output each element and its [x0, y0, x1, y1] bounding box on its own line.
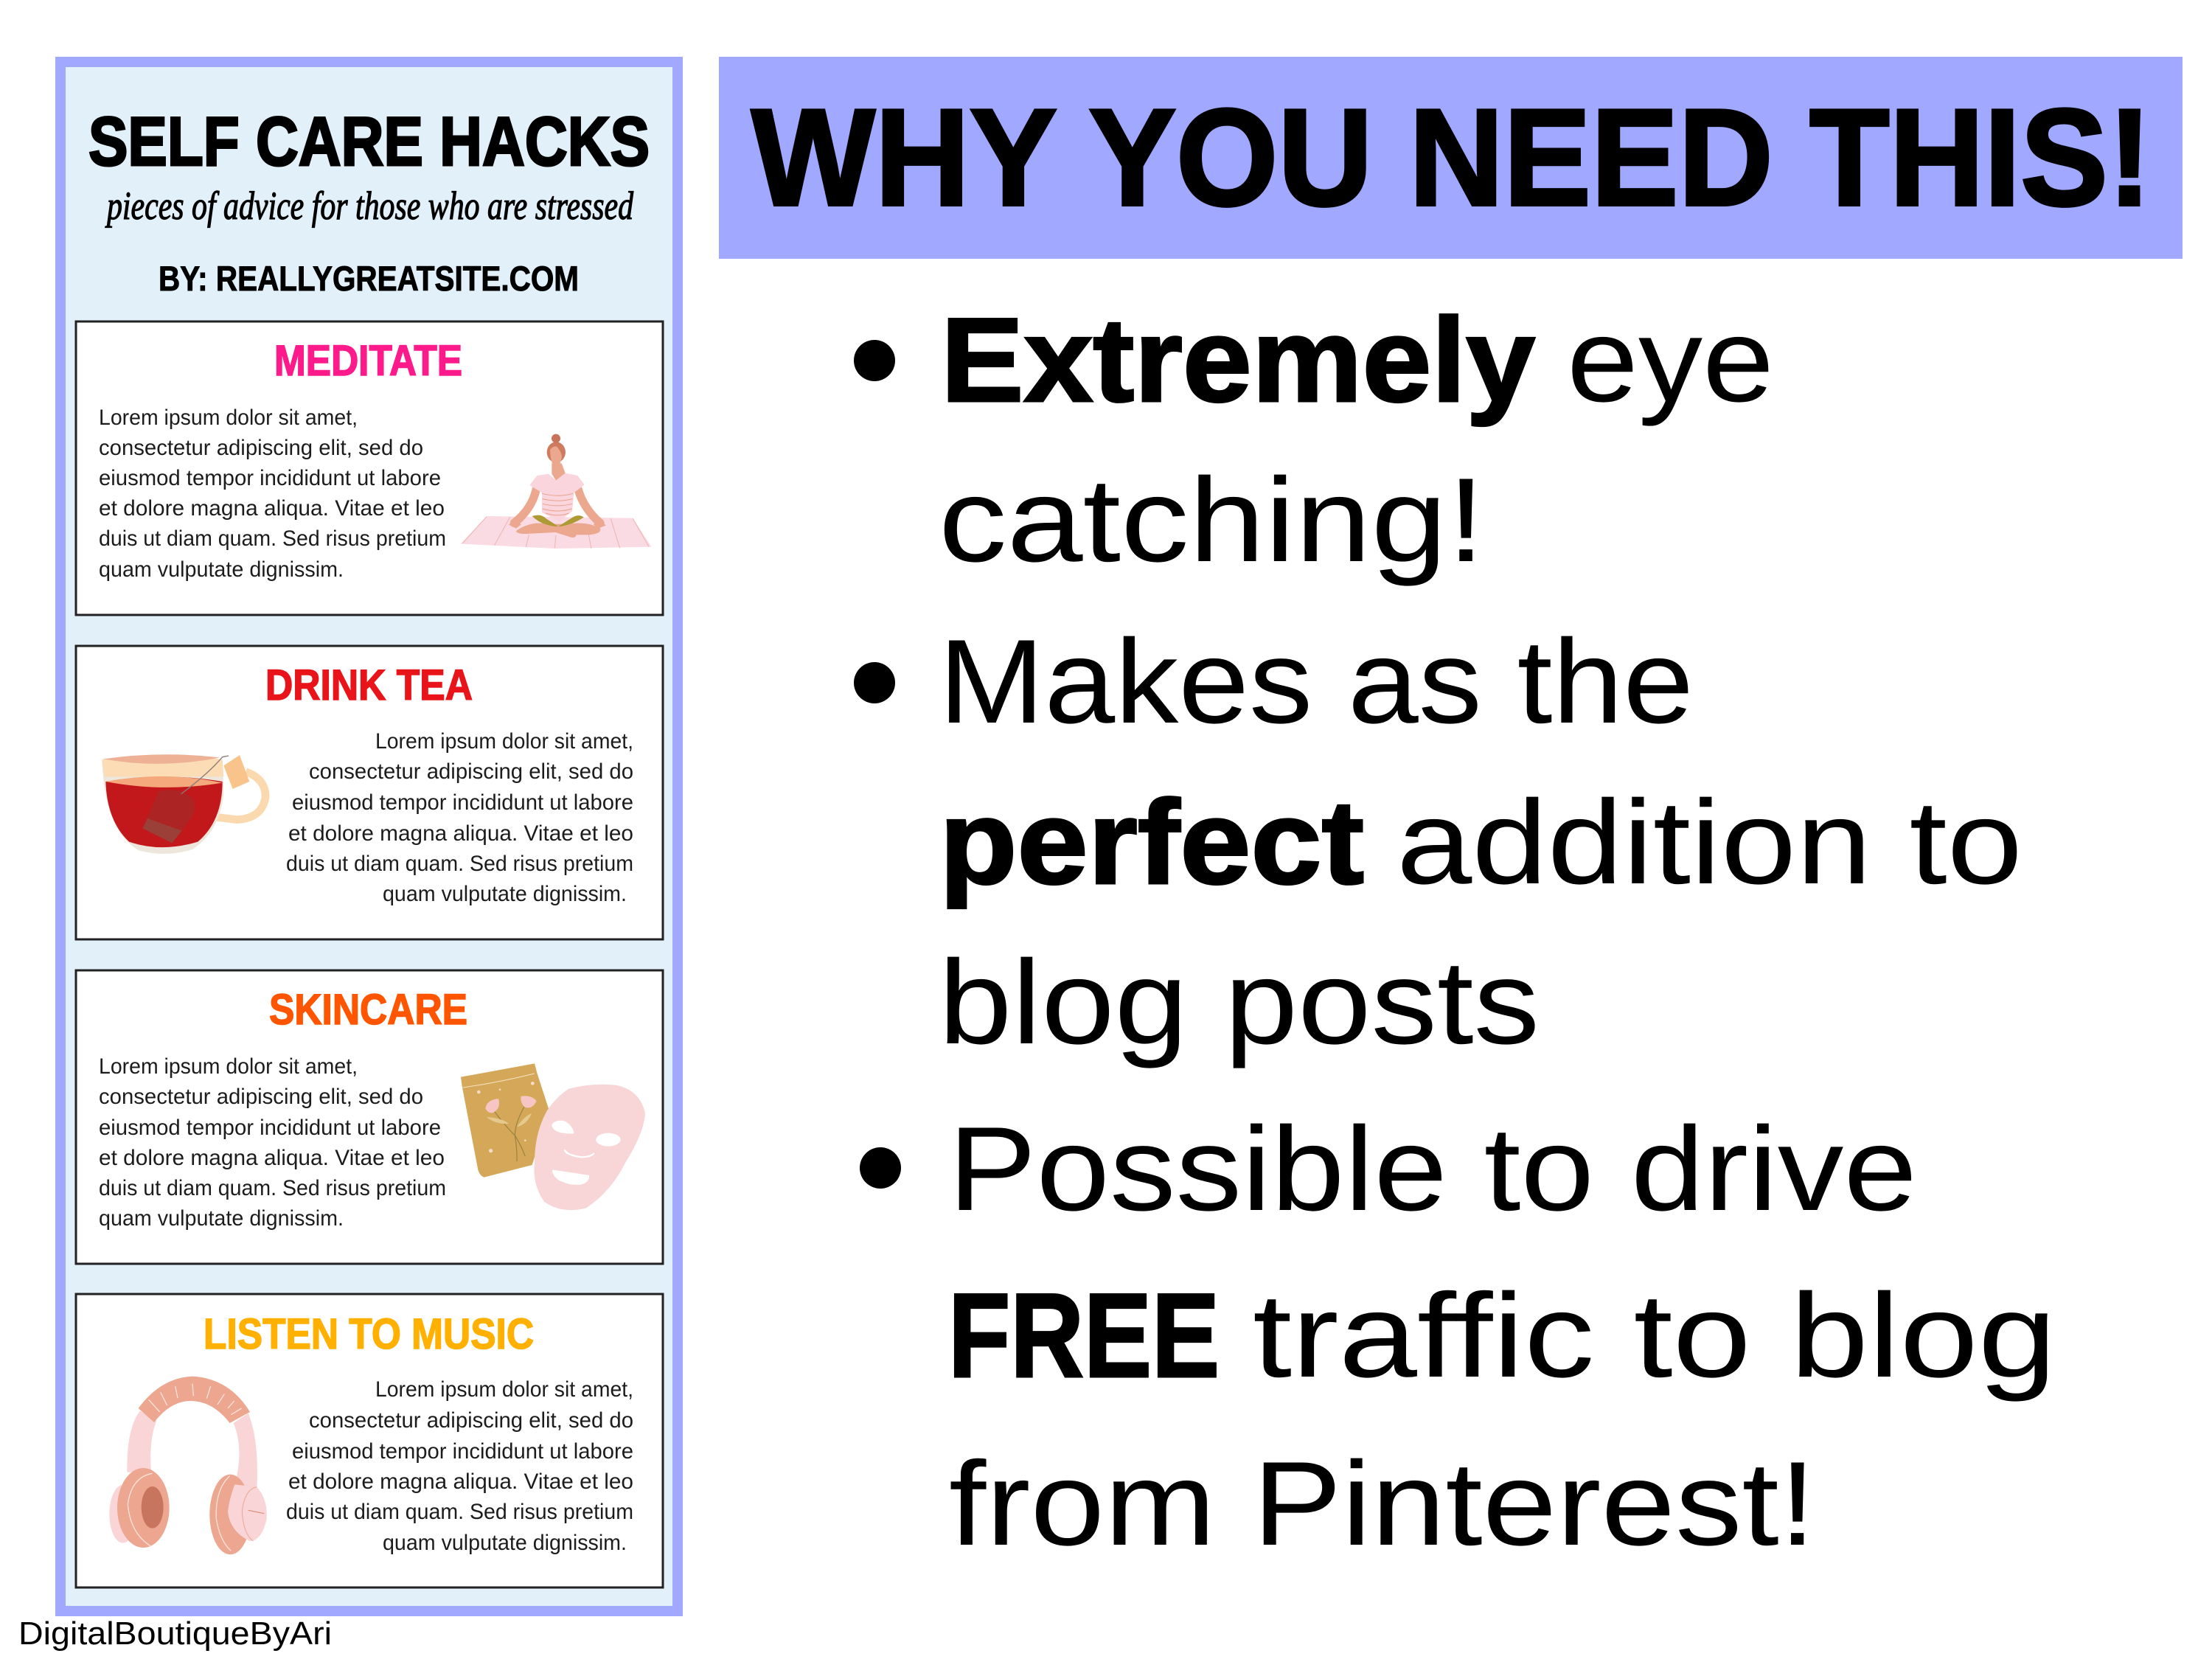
text block: meditate: consectetur adipiscing elit, sed do: [99, 436, 423, 460]
card: listen to music: [76, 1294, 663, 1587]
footer credit: DigitalBoutiqueByAri: [18, 1615, 332, 1652]
heading: drink tea: DRINK TEA: [265, 661, 473, 709]
byline: BY: REALLYGREATSITE.COM: [159, 259, 579, 298]
bullet 3: Possible to drive: [948, 1102, 1917, 1236]
icon: woman meditating on mat: [461, 434, 651, 549]
bullet 1: catching!: [939, 453, 1485, 587]
text block: drink tea: quam vulputate dignissim.: [383, 882, 627, 906]
text block: listen to music: quam vulputate dignissim.: [383, 1531, 627, 1555]
text block: listen to music: Lorem ipsum dolor sit amet,: [375, 1377, 633, 1402]
text block: skincare: Lorem ipsum dolor sit amet,: [99, 1054, 358, 1079]
card: skincare: [76, 970, 663, 1264]
text block: meditate: quam vulputate dignissim.: [99, 557, 344, 582]
text block: meditate: eiusmod tempor incididunt ut labore: [99, 466, 441, 490]
bullet 3: FREE: [948, 1269, 1220, 1402]
icon: face mask and packet: [461, 1063, 645, 1210]
text block: drink tea: et dolore magna aliqua. Vitae et leo: [288, 821, 633, 846]
heading: listen to music: LISTEN TO MUSIC: [204, 1310, 534, 1358]
text block: skincare: et dolore magna aliqua. Vitae et leo: [99, 1146, 445, 1170]
card: meditate: [76, 321, 663, 615]
heading: meditate: MEDITATE: [274, 337, 462, 385]
text block: listen to music: et dolore magna aliqua. Vitae et leo: [288, 1470, 633, 1494]
text block: meditate: duis ut diam quam. Sed risus pretium: [99, 526, 446, 551]
text block: listen to music: duis ut diam quam. Sed risus pretium: [286, 1500, 633, 1524]
bullet 1: [854, 293, 1774, 587]
bullet 2: perfect: [939, 776, 1364, 909]
text block: skincare: eiusmod tempor incididunt ut labore: [99, 1116, 441, 1140]
subtitle: pieces of advice for those who are stressed: [105, 184, 634, 228]
icon: headphones: [109, 1377, 267, 1554]
text block: listen to music: [286, 1377, 633, 1555]
text block: listen to music: consectetur adipiscing elit, sed do: [309, 1408, 633, 1433]
text block: skincare: [99, 1054, 446, 1231]
panel: self care hacks infographic: [55, 57, 683, 1616]
banner heading: WHY YOU NEED THIS!: [751, 80, 2152, 234]
bullet 1: Extremely: [941, 293, 1535, 427]
bullet 3: from Pinterest!: [949, 1437, 1816, 1571]
icon: cup of tea: [102, 754, 265, 854]
text block: drink tea: consectetur adipiscing elit, sed do: [309, 759, 633, 784]
text block: meditate: Lorem ipsum dolor sit amet,: [99, 406, 358, 430]
text block: meditate: [99, 406, 446, 582]
heading: self care hacks: SELF CARE HACKS: [88, 102, 650, 180]
card: drink tea: [76, 646, 663, 939]
text block: drink tea: Lorem ipsum dolor sit amet,: [375, 729, 633, 754]
banner: why you need this: [719, 57, 2183, 259]
bullet 3: traffic to blog: [1253, 1269, 2056, 1402]
text block: skincare: duis ut diam quam. Sed risus pretium: [99, 1176, 446, 1200]
text block: drink tea: eiusmod tempor incididunt ut labore: [292, 790, 633, 815]
bullet 1: eye: [1567, 293, 1774, 427]
text block: meditate: et dolore magna aliqua. Vitae et leo: [99, 496, 445, 521]
bullet 2: Makes as the: [939, 615, 1694, 748]
text block: skincare: consectetur adipiscing elit, sed do: [99, 1085, 423, 1109]
bullet 3: [860, 1102, 2056, 1571]
text block: listen to music: eiusmod tempor incididunt ut labore: [292, 1439, 633, 1464]
text block: drink tea: [286, 729, 633, 906]
text block: drink tea: duis ut diam quam. Sed risus pretium: [286, 852, 633, 876]
text block: skincare: quam vulputate dignissim.: [99, 1206, 344, 1231]
heading: skincare: SKINCARE: [269, 986, 467, 1034]
bullet 2: [854, 615, 2023, 1069]
bullet 2: addition to: [1397, 776, 2023, 909]
bullet list: [854, 293, 2056, 1571]
bullet 2: blog posts: [939, 936, 1540, 1069]
